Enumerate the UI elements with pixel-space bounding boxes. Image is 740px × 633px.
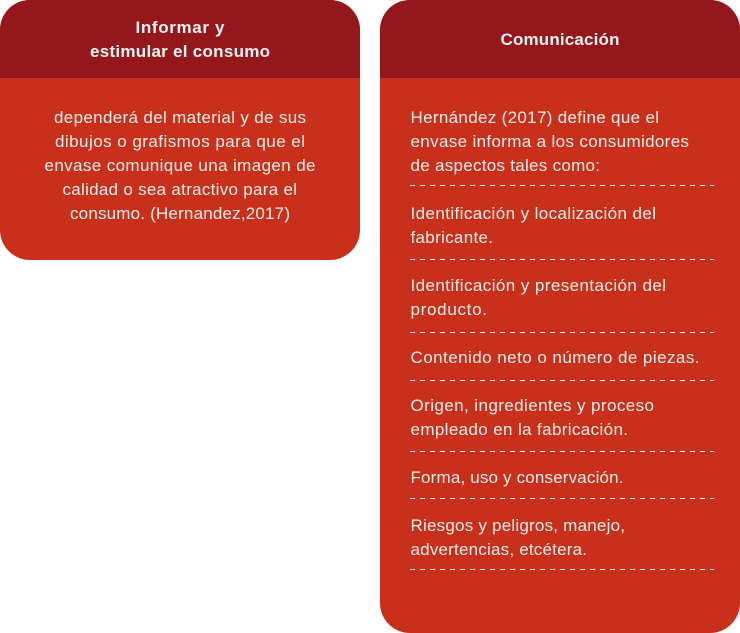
text block: descripción: calidad o sea atractivo para el xyxy=(62,180,297,199)
heading: informar y estimular el consumo: estimular el consumo xyxy=(90,42,270,61)
text block: descripción: envase comunique una imagen de xyxy=(44,156,316,175)
item: riesgos y peligros: advertencias, etcétera. xyxy=(410,540,587,559)
item: riesgos y peligros xyxy=(410,516,625,559)
item: forma, uso y conservación: Forma, uso y conservación. xyxy=(410,468,624,487)
panel body xyxy=(0,0,360,260)
text block: introducción xyxy=(410,108,689,175)
text block: descripción: dependerá del material y de sus xyxy=(54,108,306,127)
text block: introducción: de aspectos tales como: xyxy=(410,156,600,175)
heading: informar y estimular el consumo: Informar y xyxy=(136,18,225,37)
panel: comunicación xyxy=(380,0,740,633)
text block: descripción: dibujos o grafismos para que el xyxy=(55,132,305,151)
panel: informar y estimular el consumo xyxy=(0,0,360,260)
text block: introducción: Hernández (2017) define que el xyxy=(410,108,659,127)
item: identificación del fabricante: fabricante. xyxy=(410,228,493,247)
heading: comunicación: Comunicación xyxy=(500,30,620,49)
text block: descripción: consumo. (Hernandez,2017) xyxy=(70,204,290,223)
item: origen e ingredientes: empleado en la fabricación. xyxy=(410,420,628,439)
item: riesgos y peligros: Riesgos y peligros, manejo, xyxy=(410,516,625,535)
item: identificación del producto xyxy=(410,276,666,319)
panel body xyxy=(380,0,740,633)
item: origen e ingredientes xyxy=(410,396,654,439)
text block: introducción: envase informa a los consumidores xyxy=(410,132,689,151)
panel header band xyxy=(0,0,360,78)
item: identificación del producto: producto. xyxy=(410,300,487,319)
item: contenido neto: Contenido neto o número de piezas. xyxy=(410,348,700,367)
item: identificación del fabricante xyxy=(410,204,656,247)
item: identificación del fabricante: Identificación y localización del xyxy=(410,204,656,223)
heading: informar y estimular el consumo xyxy=(90,18,270,61)
panel header band xyxy=(380,0,740,78)
item: origen e ingredientes: Origen, ingredientes y proceso xyxy=(410,396,654,415)
item: identificación del producto: Identificación y presentación del xyxy=(410,276,666,295)
text block: descripción xyxy=(44,108,316,223)
